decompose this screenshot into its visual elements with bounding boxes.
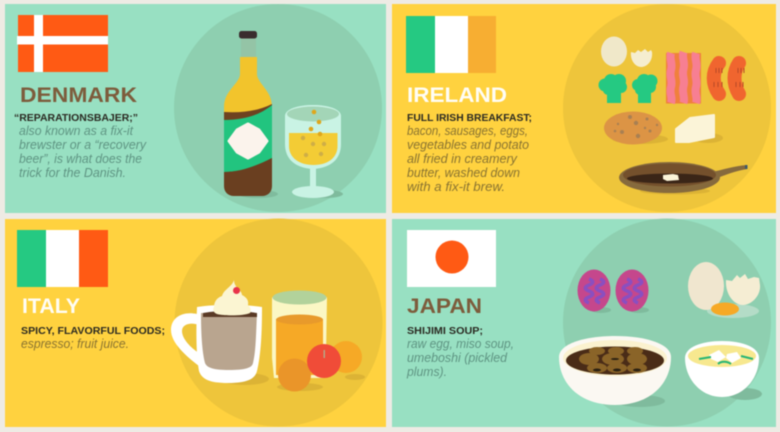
description: Italy: SPICY, FLAVORFUL FOODS; <box>21 326 165 337</box>
illustration: broccoli <box>598 74 658 103</box>
illustration: beer bottle <box>224 31 278 198</box>
description: Japan <box>406 326 514 379</box>
description: Japan: raw egg, miso soup, <box>407 337 514 351</box>
illustration: juice glass <box>272 290 327 378</box>
illustration: bacon <box>666 52 701 104</box>
flag: Denmark <box>17 15 108 72</box>
heading: Japan: JAPAN <box>407 295 482 318</box>
illustration: raw egg <box>688 262 760 318</box>
description: Ireland: all fried in creamery <box>407 152 518 166</box>
illustration: beer glass <box>285 105 343 198</box>
description: Ireland: butter, washed down <box>407 166 520 180</box>
description: Ireland: bacon, sausages, eggs, <box>407 124 528 138</box>
description: Ireland: with a fix-it brew. <box>407 180 505 194</box>
illustration: apple <box>307 344 341 378</box>
description: Japan: umeboshi (pickled <box>407 351 508 365</box>
flag: Ireland <box>406 16 496 73</box>
description: Japan: SHIJIMI SOUP; <box>407 326 483 337</box>
illustration: potato cake <box>604 112 668 144</box>
description: Denmark: “REPARATIONSBAJER;” <box>14 113 138 124</box>
panel: Japan <box>392 218 776 427</box>
description: Denmark: also known as a fix-it <box>19 124 134 138</box>
illustration: egg <box>601 36 627 66</box>
description: Denmark: brewster or a “recovery <box>19 138 147 152</box>
description: Italy: espresso; fruit juice. <box>21 337 129 351</box>
description: Denmark <box>14 113 147 180</box>
description: Ireland: vegetables and potato <box>407 138 529 152</box>
illustration: miso soup bowl <box>685 341 762 400</box>
illustration: eggshell <box>631 49 652 67</box>
illustration: umeboshi plums <box>578 270 649 313</box>
description: Denmark: trick for the Danish. <box>19 166 126 180</box>
description: Ireland <box>407 113 532 194</box>
illustration: shijimi soup bowl <box>559 336 671 407</box>
description: Denmark: beer”, is what does the <box>19 152 142 166</box>
illustration: back orange <box>330 341 365 380</box>
illustration: coffee mug <box>171 280 269 385</box>
flag: Italy <box>17 230 108 287</box>
flag: Japan <box>407 230 496 287</box>
illustration: butter <box>676 115 723 143</box>
illustration: sausages <box>714 63 744 94</box>
illustration: frying pan <box>619 162 748 194</box>
panel: Denmark <box>5 4 386 213</box>
panel: Italy <box>5 218 386 427</box>
illustration: front orange <box>277 358 323 392</box>
description: Japan: plums). <box>406 365 447 379</box>
description: Italy <box>21 326 165 351</box>
heading: Denmark: DENMARK <box>20 84 137 107</box>
description: Ireland: FULL IRISH BREAKFAST; <box>407 113 532 124</box>
heading: Ireland: IRELAND <box>407 84 507 107</box>
heading: Italy: ITALY <box>22 295 80 318</box>
panel: Ireland <box>392 4 776 213</box>
